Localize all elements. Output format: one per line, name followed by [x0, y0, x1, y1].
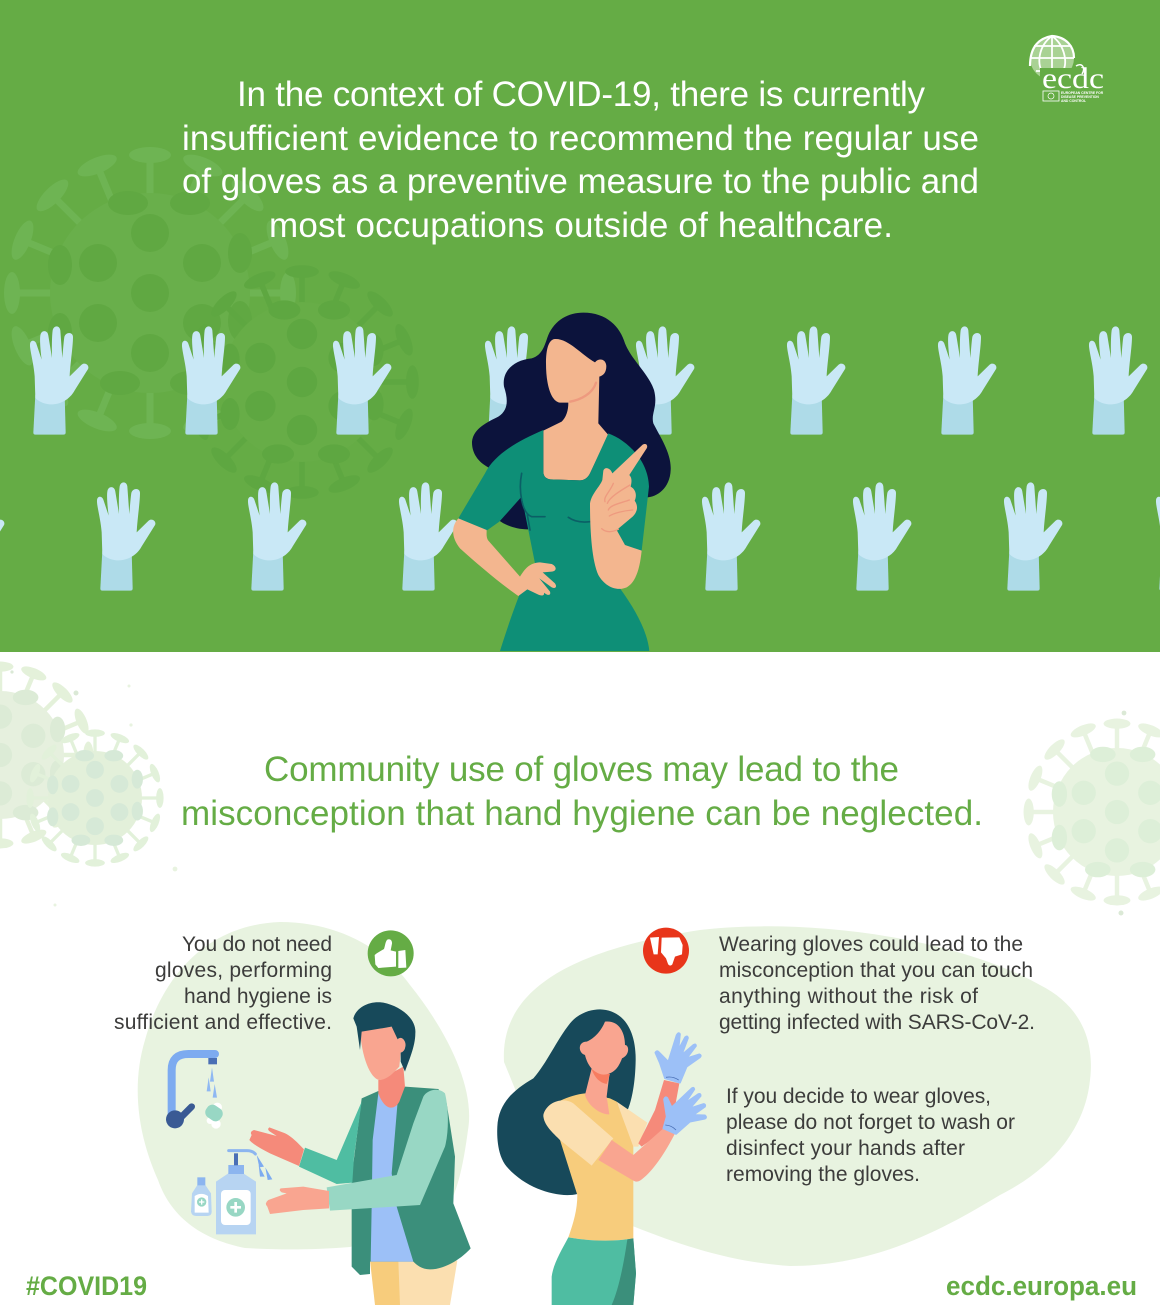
virus pattern: white section left large virus — [0, 662, 93, 848]
icon: lower blue glove — [663, 1088, 706, 1134]
heading: misconception: Community use of gloves may lead to the — [264, 750, 899, 789]
footer: website: ecdc.europa.eu — [946, 1271, 1137, 1301]
illustration: woman pointing — [453, 313, 671, 651]
logo: ecdc: AND CONTROL — [1061, 99, 1086, 103]
text: wash hands advice — [726, 1085, 1015, 1186]
panel: green header background — [0, 0, 1160, 652]
virus pattern: white section right virus — [1024, 719, 1160, 905]
text: misconception warning: Wearing gloves could lead to the — [719, 933, 1023, 956]
text: wash hands advice: disinfect your hands after — [726, 1137, 965, 1160]
text: do not need gloves — [114, 933, 332, 1034]
heading: misconception — [181, 750, 983, 833]
icon: pump bottle — [216, 1151, 272, 1234]
text: do not need gloves: hand hygiene is — [184, 985, 332, 1008]
text: wash hands advice: removing the gloves. — [726, 1163, 920, 1186]
heading: misconception: misconception that hand hygiene can be neglected. — [181, 794, 983, 833]
text: do not need gloves: sufficient and effective. — [114, 1011, 332, 1034]
title: insufficient evidence to recommend the regular use — [182, 119, 979, 158]
footer: hashtag: #COVID19 — [26, 1271, 147, 1301]
virus pattern: white section left small virus — [26, 729, 164, 867]
logo: ecdc: EUROPEAN CENTRE FOR — [1061, 91, 1104, 95]
icon: small sanitizer bottle — [191, 1177, 212, 1216]
text: wash hands advice: please do not forget to wash or — [726, 1111, 1015, 1134]
icon: faucet — [166, 1054, 217, 1128]
blob: left background — [138, 922, 469, 1249]
text: do not need gloves: gloves, performing — [155, 959, 332, 982]
illustration: man washing hands — [249, 1002, 471, 1305]
text: misconception warning: getting infected with SARS-CoV-2. — [719, 1011, 1035, 1034]
logo: ecdc: ecdc — [1042, 62, 1104, 95]
gloves: bottom row — [0, 482, 1160, 591]
text: wash hands advice: If you decide to wear gloves, — [726, 1085, 991, 1108]
icon: soap — [203, 1102, 225, 1129]
icon: thumbs down — [643, 928, 689, 974]
virus pattern: header small virus — [185, 265, 419, 499]
title: most occupations outside of healthcare. — [269, 206, 893, 245]
title: In the context of COVID-19, there is currently — [237, 75, 926, 114]
illustration: hand washing items — [166, 1054, 272, 1234]
gloves: top row — [30, 326, 1147, 435]
text: misconception warning — [719, 933, 1035, 1034]
text: do not need gloves: You do not need — [182, 933, 332, 956]
icon: thumbs up — [368, 930, 414, 976]
text: misconception warning: anything without the risk of — [719, 985, 978, 1008]
virus pattern: header large virus — [4, 147, 296, 439]
title: of gloves as a preventive measure to the public and — [182, 162, 979, 201]
blob: right background — [504, 926, 1091, 1266]
logo: ecdc: DISEASE PREVENTION — [1061, 95, 1099, 99]
icon: upper blue glove — [655, 1033, 701, 1083]
text: misconception warning: misconception that you can touch — [719, 959, 1033, 982]
logo: ecdc — [1030, 36, 1104, 103]
title — [182, 75, 979, 245]
illustration: woman with gloves — [497, 1009, 706, 1305]
